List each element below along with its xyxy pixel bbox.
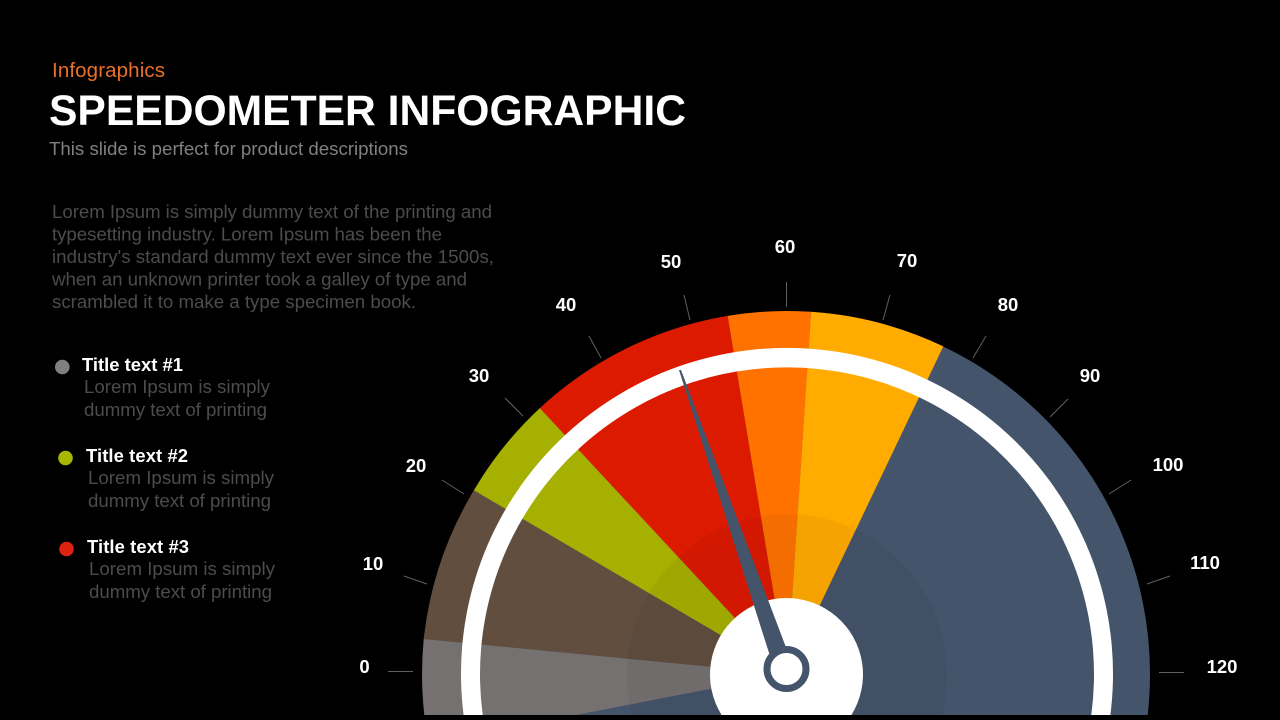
needle pointer — [679, 370, 787, 656]
legend text 3: Lorem Ipsum is simply — [89, 558, 276, 579]
scale labels: 100 — [1153, 454, 1183, 475]
eyebrow label: Infographics — [52, 59, 165, 82]
legend text 2: Lorem Ipsum is simply — [88, 467, 275, 488]
wedge: green — [474, 408, 787, 674]
legend text 3 — [89, 558, 276, 602]
wedge: orange — [728, 311, 811, 674]
legend dot: green — [58, 451, 73, 465]
legend dot: red — [59, 542, 74, 556]
speedometer gauge — [422, 311, 1150, 715]
scale labels: 120 — [1207, 656, 1237, 677]
wedge: yellow — [787, 312, 943, 674]
subtitle: This slide is perfect for product descriptions — [49, 138, 408, 159]
scale labels: 0 — [359, 656, 370, 677]
intro paragraph: scrambled it to make a type specimen book. — [52, 291, 416, 312]
scale labels: 110 — [1190, 552, 1220, 573]
scale ticks — [388, 282, 1184, 672]
intro paragraph: typesetting industry. Lorem Ipsum has been the — [52, 224, 442, 244]
scale labels: 90 — [1080, 365, 1100, 386]
intro paragraph: Lorem Ipsum is simply dummy text of the printing and — [52, 201, 492, 222]
scale labels: 30 — [469, 365, 489, 386]
inner shade circle — [627, 514, 947, 715]
scale labels: 20 — [406, 455, 426, 476]
legend item 2 — [58, 445, 275, 511]
legend text 2: dummy text of printing — [88, 490, 271, 511]
legend text 2 — [88, 467, 275, 511]
white ring — [461, 348, 1113, 715]
legend heading 1: Title text #1 — [82, 354, 183, 375]
scale labels — [359, 236, 1237, 677]
legend item 1 — [55, 354, 271, 420]
intro paragraph: industry's standard dummy text ever since the 1500s, — [52, 246, 494, 267]
intro paragraph — [51, 201, 494, 312]
legend text 1: Lorem Ipsum is simply — [84, 376, 271, 397]
intro paragraph: when an unknown printer took a galley of type and — [51, 268, 467, 290]
legend heading 3: Title text #3 — [87, 536, 189, 557]
legend text 1 — [84, 376, 271, 420]
gauge base: navy — [424, 311, 1150, 715]
legend text 3: dummy text of printing — [89, 581, 272, 602]
wedge: grey — [422, 639, 787, 715]
legend item 3 — [59, 536, 276, 602]
wedge: brown — [424, 490, 787, 674]
scale labels: 60 — [775, 236, 795, 257]
title: SPEEDOMETER INFOGRAPHIC — [49, 88, 686, 135]
scale labels: 40 — [556, 294, 576, 315]
legend dot: grey — [55, 360, 70, 374]
needle — [679, 370, 806, 688]
white hub — [710, 598, 863, 715]
wedge: red — [540, 316, 787, 674]
scale labels: 10 — [363, 553, 383, 574]
scale labels: 50 — [661, 251, 681, 272]
needle pivot ring — [767, 650, 806, 688]
legend heading 2: Title text #2 — [86, 445, 188, 466]
legend text 1: dummy text of printing — [84, 399, 267, 420]
scale labels: 80 — [998, 294, 1018, 315]
scale labels: 70 — [897, 250, 917, 271]
